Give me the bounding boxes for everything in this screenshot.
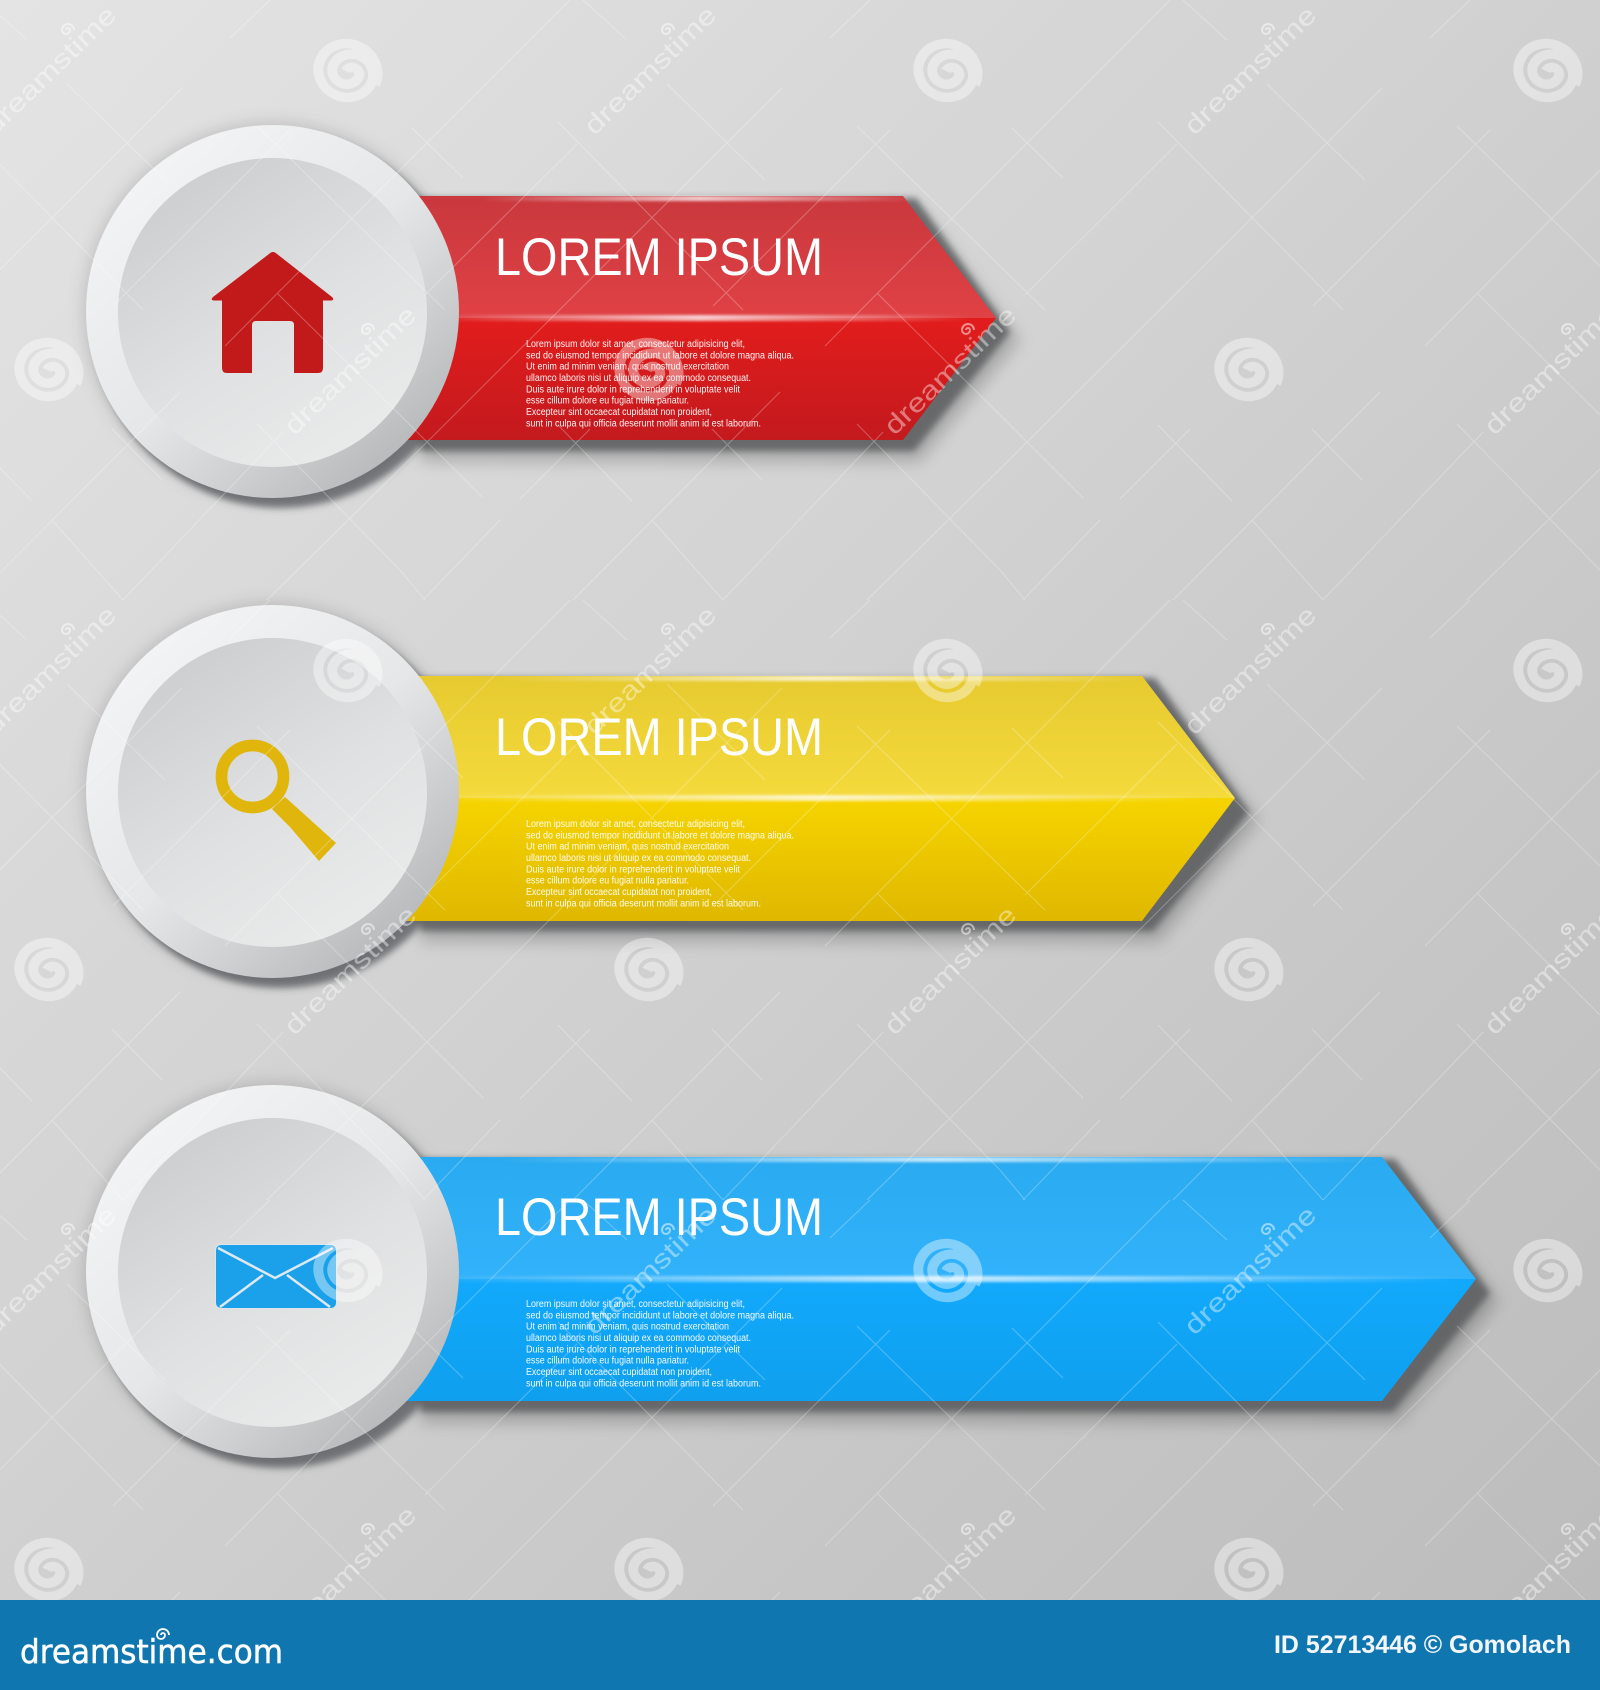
text block: red banner: Excepteur sint occaecat cupidatat non proident,	[526, 407, 712, 418]
text block: blue banner: Ut enim ad minim veniam, quis nostrud exercitation	[526, 1322, 729, 1333]
watermark text: dreamstime	[878, 1499, 1022, 1641]
watermark text: dreamstime	[578, 1199, 722, 1341]
watermark text: dreamstime	[1178, 1199, 1322, 1341]
panel: yellow banner row	[84, 602, 1259, 988]
circle shadow: blue row	[84, 1082, 468, 1468]
watermark text: dreamstime	[578, 599, 722, 741]
watermark text: dreamstime	[278, 1499, 422, 1641]
watermark text: dreamstime	[578, 0, 722, 141]
watermark text: dreamstime	[1478, 1499, 1600, 1641]
text block: blue banner	[526, 1299, 794, 1389]
text block: yellow banner: sed do eiusmod tempor incididunt ut labore et dolore magna aliqua.	[526, 830, 794, 841]
text block: blue banner: Duis aute irure dolor in reprehenderit in voluptate velit	[526, 1344, 740, 1355]
text block: yellow banner	[526, 819, 794, 909]
footer credit: ID 52713446 © Gomolach	[1274, 1631, 1571, 1659]
icon: house	[212, 252, 333, 373]
text block: red banner: ullamco laboris nisi ut aliquip ex ea commodo consequat.	[526, 373, 751, 384]
watermark text: dreamstime	[1178, 0, 1322, 141]
text block: blue banner: sed do eiusmod tempor incididunt ut labore et dolore magna aliqua.	[526, 1310, 794, 1321]
watermark text: dreamstime	[1478, 899, 1600, 1041]
footer logo: dreamstime.com	[20, 1632, 283, 1671]
watermark text: dreamstime	[878, 899, 1022, 1041]
watermark text: dreamstime	[278, 899, 422, 1041]
circle shadow: red row	[84, 122, 468, 508]
text block: yellow banner: sunt in culpa qui officia deserunt mollit anim id est laborum.	[526, 898, 761, 909]
heading: blue banner: LOREM IPSUM	[495, 1188, 823, 1247]
text block: blue banner: esse cillum dolore eu fugiat nulla pariatur.	[526, 1356, 689, 1367]
text block: red banner: sunt in culpa qui officia deserunt mollit anim id est laborum.	[526, 418, 761, 429]
circle button: blue row	[86, 1085, 459, 1458]
circle button: red row	[86, 125, 459, 498]
text block: red banner	[526, 339, 794, 429]
text block: yellow banner: Ut enim ad minim veniam, quis nostrud exercitation	[526, 842, 729, 853]
arrow: blue banner	[330, 1157, 1499, 1423]
text block: yellow banner: Duis aute irure dolor in reprehenderit in voluptate velit	[526, 864, 740, 875]
circle button: yellow row	[86, 605, 459, 978]
text block: yellow banner: ullamco laboris nisi ut aliquip ex ea commodo consequat.	[526, 853, 751, 864]
watermark text: dreamstime	[278, 299, 422, 441]
text block: red banner: esse cillum dolore eu fugiat nulla pariatur.	[526, 396, 689, 407]
watermark text: dreamstime	[1478, 299, 1600, 441]
panel: blue banner row	[84, 1082, 1499, 1468]
text block: yellow banner: Excepteur sint occaecat cupidatat non proident,	[526, 887, 712, 898]
text block: red banner: Ut enim ad minim veniam, quis nostrud exercitation	[526, 362, 729, 373]
heading: yellow banner: LOREM IPSUM	[495, 708, 823, 767]
text block: blue banner: Excepteur sint occaecat cupidatat non proident,	[526, 1367, 712, 1378]
text block: yellow banner: esse cillum dolore eu fugiat nulla pariatur.	[526, 876, 689, 887]
panel: red banner row	[84, 122, 1020, 508]
watermark text: dreamstime	[878, 299, 1022, 441]
text block: red banner: sed do eiusmod tempor incididunt ut labore et dolore magna aliqua.	[526, 350, 794, 361]
circle shadow: yellow row	[84, 602, 468, 988]
icon: envelope	[215, 1244, 337, 1309]
text block: red banner: Lorem ipsum dolor sit amet, consectetur adipisicing elit,	[526, 339, 745, 350]
text block: blue banner: Lorem ipsum dolor sit amet, consectetur adipisicing elit,	[526, 1299, 745, 1310]
arrow: red banner	[330, 196, 1020, 462]
arrow: yellow banner	[330, 676, 1259, 942]
text block: red banner: Duis aute irure dolor in reprehenderit in voluptate velit	[526, 384, 740, 395]
text block: blue banner: sunt in culpa qui officia deserunt mollit anim id est laborum.	[526, 1378, 761, 1389]
footer bar	[0, 1600, 1600, 1690]
icon: magnifying glass	[222, 746, 336, 861]
text block: blue banner: ullamco laboris nisi ut aliquip ex ea commodo consequat.	[526, 1333, 751, 1344]
text block: yellow banner: Lorem ipsum dolor sit amet, consectetur adipisicing elit,	[526, 819, 745, 830]
heading: red banner: LOREM IPSUM	[495, 228, 823, 287]
watermark text: dreamstime	[1178, 599, 1322, 741]
